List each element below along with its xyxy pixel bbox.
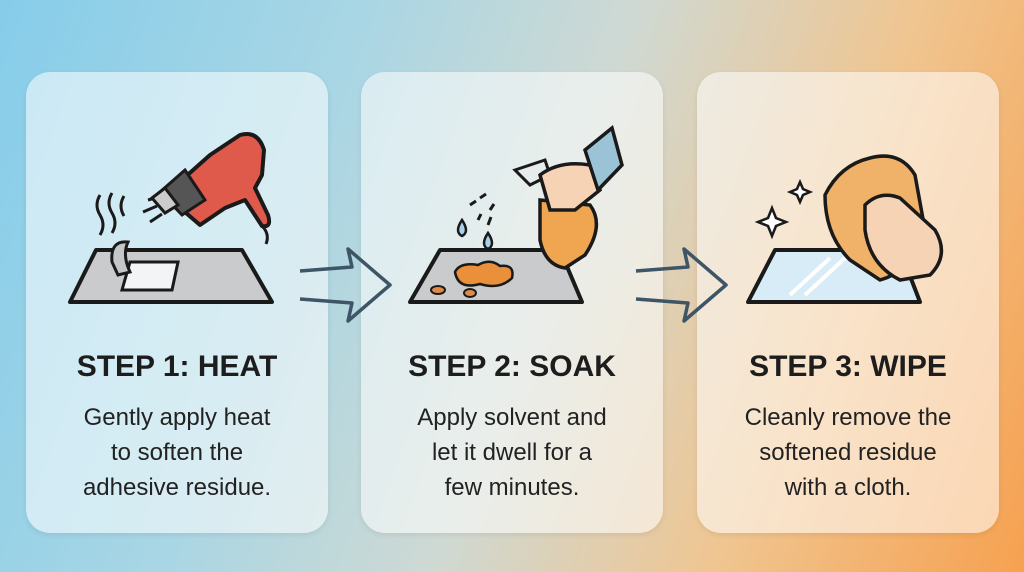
text: step 1 description <box>83 404 271 501</box>
panel: step 1 heat <box>26 72 328 533</box>
panel: step 2 soak <box>361 72 663 533</box>
text: step 2 description: few minutes. <box>445 474 579 501</box>
text: step 3 description: Cleanly remove the <box>745 404 951 431</box>
arrow 2 <box>636 247 728 323</box>
icon: spray bottle on stain <box>408 125 624 304</box>
text: step 3 description <box>745 404 951 501</box>
text: step 1 description: adhesive residue. <box>83 474 271 501</box>
heading: step 3: STEP 3: WIPE <box>749 350 947 383</box>
text: step 3 description: softened residue <box>759 439 937 466</box>
heading: step 2: STEP 2: SOAK <box>408 350 616 383</box>
heading: step 1: STEP 1: HEAT <box>77 350 277 383</box>
text: step 2 description: Apply solvent and <box>417 404 607 431</box>
panel: step 3 wipe <box>697 72 999 533</box>
text: step 1 description: to soften the <box>111 439 243 466</box>
text: step 2 description <box>417 404 607 501</box>
arrow 1 <box>300 247 392 323</box>
text: step 3 description: with a cloth. <box>785 474 911 501</box>
text: step 2 description: let it dwell for a <box>432 439 592 466</box>
icon: heat gun on residue <box>68 132 274 304</box>
icon: cloth wiping glass <box>746 154 944 304</box>
text: step 1 description: Gently apply heat <box>84 404 270 431</box>
